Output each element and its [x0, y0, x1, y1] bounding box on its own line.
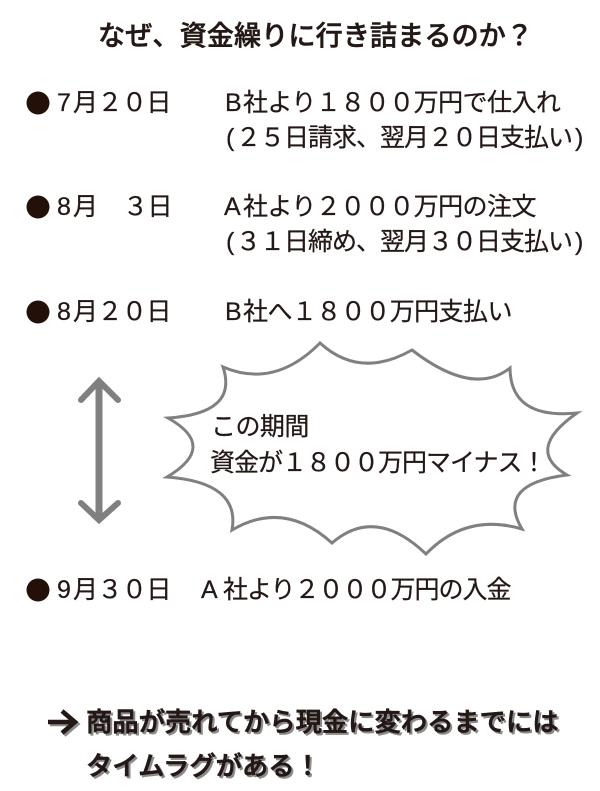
entry: August 3: ３日	[123, 193, 172, 221]
entry: September 30: A	[201, 576, 218, 604]
entry: July 20: ２５日請求、翌月２０日支払い	[236, 124, 572, 152]
entry: August 3: 社より２０００万円の注文	[243, 193, 536, 221]
icon: right arrow	[48, 711, 75, 733]
entry: August 20: 8	[57, 298, 70, 326]
conclusion: time lag callout: タイムラグがある！	[86, 751, 321, 781]
entry: September 30: 月３０日	[73, 576, 171, 604]
entry: August 3: 8	[57, 193, 70, 221]
entry: July 20: B	[225, 89, 241, 117]
entry: August 3: ３１日締め、翌月３０日支払い	[236, 228, 572, 256]
entry: August 20	[26, 298, 512, 326]
arrow: double-headed period arrow	[81, 381, 118, 520]
entry: July 20: (	[226, 124, 235, 152]
entry: August 3: A	[224, 193, 241, 221]
entry: September 30: 9	[57, 576, 70, 604]
callout: burst with period shortfall: この期間	[211, 413, 309, 441]
title: なぜ、資金繰りに行き詰まるのか？	[98, 20, 533, 51]
entry: July 20: 月２０日	[73, 89, 171, 117]
entry: July 20: 7	[57, 89, 70, 117]
entry: August 3	[26, 193, 583, 256]
entry: August 20: B	[225, 298, 241, 326]
entry: August 3: (	[226, 228, 235, 256]
entry: July 20	[26, 89, 583, 152]
entry: August 3: )	[575, 228, 583, 256]
callout: burst with period shortfall: 資金が１８００万円マイナス！	[210, 449, 546, 477]
entry: August 20: 社へ１８００万円支払い	[243, 298, 512, 326]
entry: August 20: 月２０日	[73, 298, 171, 326]
entry: July 20: )	[575, 124, 583, 152]
entry: September 30: 社より２０００万円の入金	[223, 576, 512, 604]
conclusion: time lag callout	[48, 707, 559, 781]
callout: burst with period shortfall	[167, 343, 577, 554]
entry: September 30	[26, 576, 512, 604]
conclusion: time lag callout: 商品が売れてから現金に変わるまでには	[86, 707, 559, 737]
entry: July 20: 社より１８００万円で仕入れ	[243, 89, 561, 117]
entry: August 3: 月	[73, 193, 97, 221]
